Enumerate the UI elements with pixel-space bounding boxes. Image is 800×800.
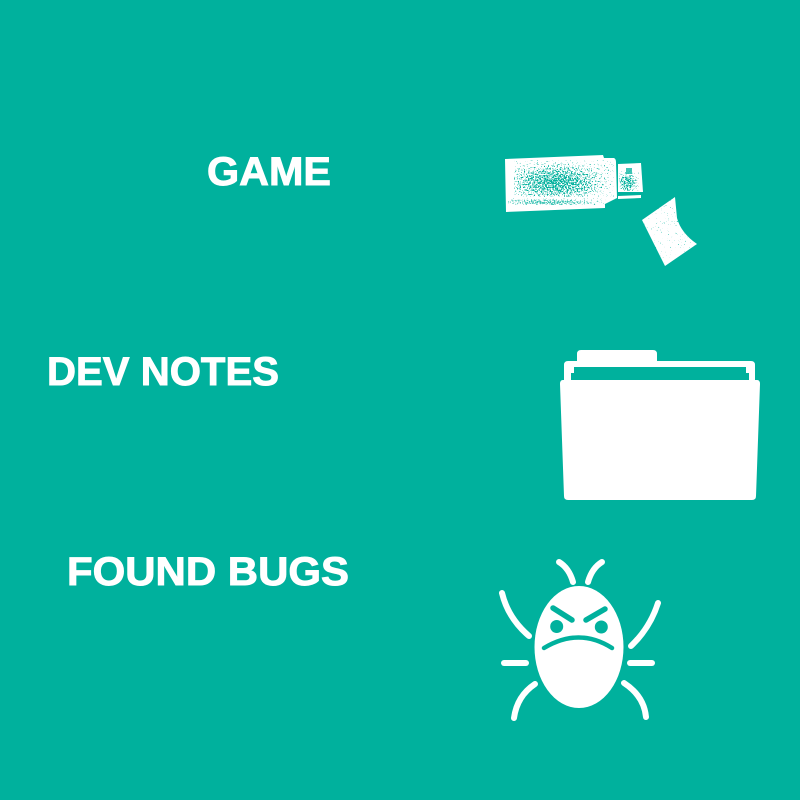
usb drive body [505, 155, 617, 212]
icon: folder [560, 350, 760, 500]
bug legs and antennae [502, 562, 658, 718]
right eye [595, 620, 608, 634]
usb connector shadow [619, 170, 639, 191]
paper sheet speckle [642, 197, 697, 266]
right eyebrow [586, 609, 605, 620]
usb connector base [618, 195, 641, 199]
heading: game: GAME [207, 150, 331, 194]
folder front [560, 380, 760, 500]
usb connector slot [626, 168, 632, 174]
usb connector [618, 163, 643, 192]
folder inner opening [571, 367, 749, 380]
left eye [550, 620, 563, 633]
paper sheet [642, 197, 697, 266]
bug body [534, 586, 624, 708]
heading: dev notes: DEV NOTES [47, 350, 279, 394]
worn strip on lower usb body [508, 198, 606, 205]
folder back [564, 361, 755, 381]
bug face [544, 608, 612, 648]
icon: usb drive and paper [505, 155, 697, 266]
frown [544, 638, 612, 648]
worn print on usb body [514, 160, 614, 197]
left eyebrow [553, 608, 572, 620]
heading: found bugs: FOUND BUGS [67, 550, 349, 594]
folder tab [577, 350, 657, 362]
icon: angry bug [502, 562, 658, 718]
